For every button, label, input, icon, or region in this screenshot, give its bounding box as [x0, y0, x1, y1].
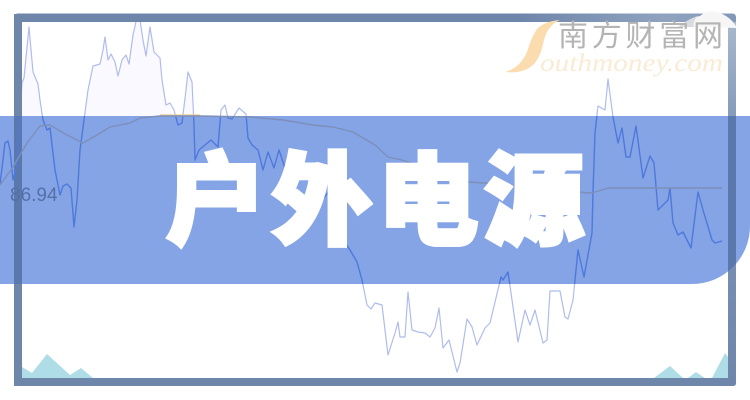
mountains: bottom left — [22, 354, 93, 378]
watermark: Chinese name: 南方财富网 — [558, 11, 723, 55]
price line inside band — [0, 116, 722, 284]
moving average line inside band — [0, 116, 722, 193]
moving average line (outside band) — [160, 114, 200, 116]
frame: right edge — [728, 22, 736, 382]
frame: bottom edge — [14, 378, 736, 386]
title: 户外电源 — [166, 146, 584, 258]
frame: top edge — [14, 14, 736, 22]
watermark — [505, 11, 737, 77]
band — [0, 116, 750, 284]
axis value label: 86.94 — [10, 185, 58, 206]
mountains: bottom right — [654, 353, 728, 378]
price area fill — [22, 17, 193, 116]
frame inside band — [14, 116, 736, 284]
watermark: S swoosh — [505, 20, 560, 72]
frame: left edge — [14, 14, 22, 386]
watermark: domain: outhmoney.com — [540, 50, 723, 77]
watermark: cloud — [678, 12, 737, 28]
